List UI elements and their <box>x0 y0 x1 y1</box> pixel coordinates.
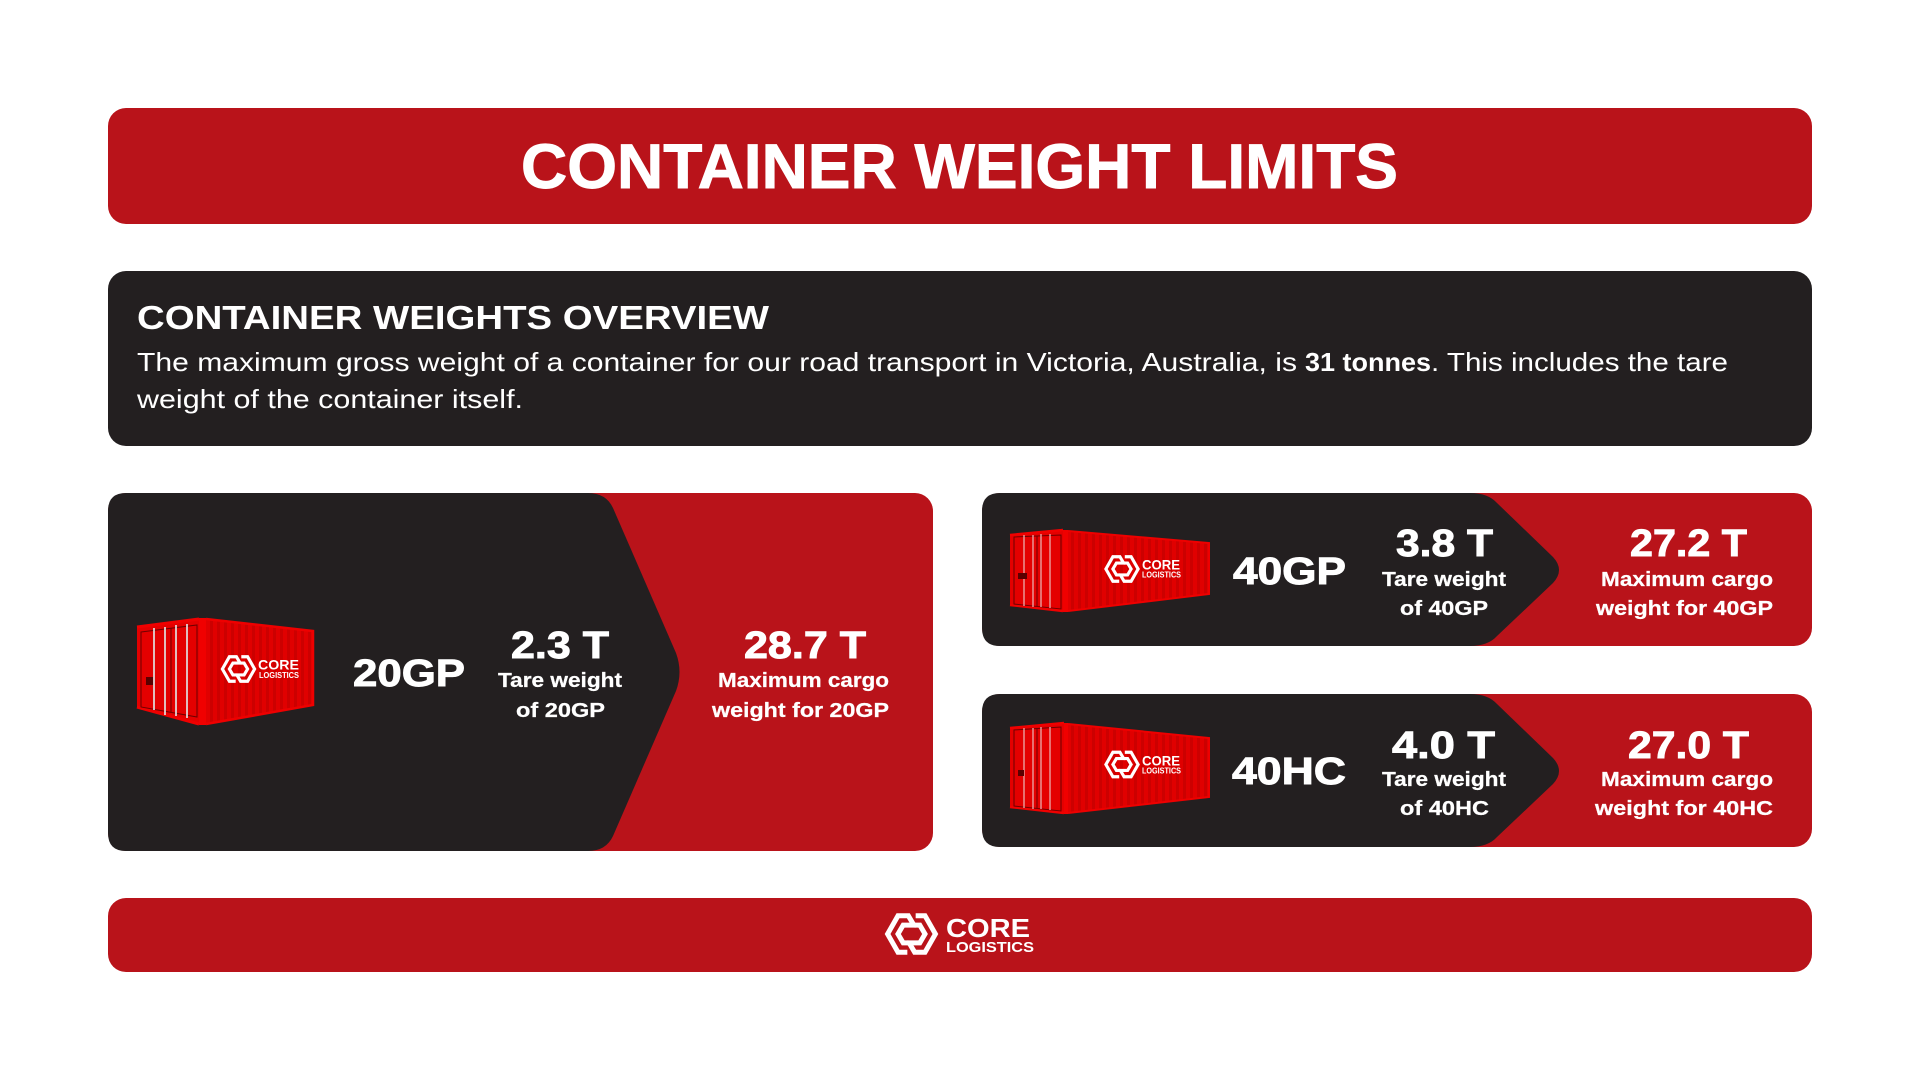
type label: 40GP: 40GP <box>1233 551 1346 593</box>
tare weight: 20GP: 2.3 T <box>511 625 609 667</box>
overview text <box>136 347 1728 414</box>
dark arrow: 40HC <box>982 694 1559 847</box>
icon: hexagon logo mark <box>888 916 935 952</box>
maximum cargo: 40HC <box>1594 725 1773 820</box>
maximum cargo: 40HC: 27.0 T <box>1628 725 1749 767</box>
container image: 40HC <box>1010 723 1209 814</box>
container image: 20GP: LOGISTICS <box>259 670 299 680</box>
tare weight: 40HC: Tare weight <box>1382 769 1506 791</box>
tare weight: 40GP: 3.8 T <box>1396 523 1493 565</box>
maximum cargo: 40HC: weight for 40HC <box>1594 798 1773 820</box>
container image: 20GP <box>137 618 313 725</box>
overview text: The maximum gross weight of a container for our road transport in Victoria, Australia, is <box>137 347 1297 377</box>
dark arrow: 20GP <box>108 493 680 851</box>
tare weight: 40GP <box>1382 523 1506 620</box>
maximum cargo: 40GP: 27.2 T <box>1630 523 1747 565</box>
maximum cargo: 40GP: weight for 40GP <box>1595 598 1773 620</box>
tare weight: 40HC <box>1382 725 1506 820</box>
tare weight: 40GP: of 40GP <box>1400 598 1488 620</box>
container image: 40GP: LOGISTICS <box>1142 570 1181 580</box>
tare weight: 20GP: of 20GP <box>516 700 605 722</box>
overview text: . This includes the tare <box>1431 347 1728 377</box>
panel: 40HC <box>982 694 1812 847</box>
maximum cargo: 40GP <box>1595 523 1773 620</box>
title banner <box>108 108 1812 224</box>
container image: 40GP: CORE <box>1142 556 1180 572</box>
overview text: weight of the container itself. <box>136 384 523 414</box>
container image: 40HC: CORE <box>1142 752 1180 768</box>
footer banner <box>108 898 1812 972</box>
maximum cargo: 40GP: Maximum cargo <box>1601 569 1773 591</box>
overview heading: CONTAINER WEIGHTS OVERVIEW <box>137 299 770 336</box>
dark arrow: 40GP <box>982 493 1559 646</box>
footer logo <box>888 913 1034 956</box>
maximum cargo: 20GP: 28.7 T <box>744 625 866 667</box>
title text: CONTAINER WEIGHT LIMITS <box>521 132 1398 202</box>
footer logo: LOGISTICS <box>946 939 1034 956</box>
container image: 40GP <box>1010 530 1209 612</box>
panel: overview <box>108 271 1812 446</box>
type label: 20GP: 20GP <box>353 653 465 695</box>
type label: 40HC: 40HC <box>1232 751 1346 793</box>
footer logo: CORE <box>946 913 1030 943</box>
maximum cargo: 40HC: Maximum cargo <box>1601 769 1773 791</box>
panel: 40GP <box>982 493 1812 646</box>
container image: 20GP: CORE <box>258 656 299 672</box>
tare weight: 40HC: 4.0 T <box>1392 725 1495 767</box>
overview text: 31 tonnes <box>1305 347 1431 377</box>
maximum cargo: 20GP: Maximum cargo <box>718 670 889 692</box>
maximum cargo: 20GP <box>711 625 889 722</box>
container image: 40HC: LOGISTICS <box>1142 766 1181 776</box>
tare weight: 20GP <box>498 625 622 722</box>
maximum cargo: 20GP: weight for 20GP <box>711 700 889 722</box>
panel: 20GP <box>108 493 933 851</box>
tare weight: 40GP: Tare weight <box>1382 569 1506 591</box>
tare weight: 40HC: of 40HC <box>1400 798 1489 820</box>
tare weight: 20GP: Tare weight <box>498 670 622 692</box>
